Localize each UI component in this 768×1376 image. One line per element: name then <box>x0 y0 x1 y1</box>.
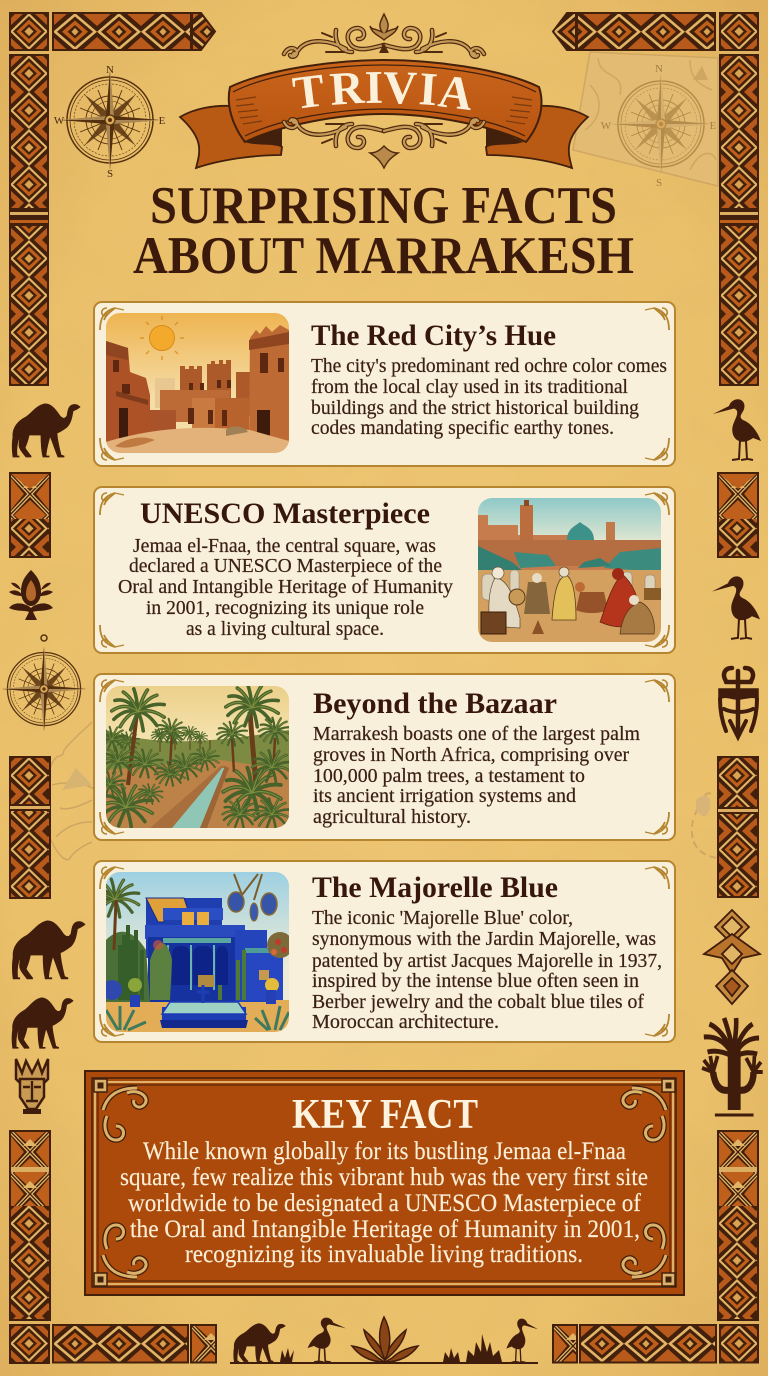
icon: palm silhouette <box>702 1018 763 1115</box>
icon: camel 2 <box>12 921 85 979</box>
faint map: left side <box>50 722 94 860</box>
right ribbon tail <box>486 106 588 168</box>
icon: shrubs <box>443 1334 502 1362</box>
antique map with compass: right: N <box>655 63 663 75</box>
panel: The Red City's Hue <box>94 302 675 466</box>
right border column <box>720 55 758 385</box>
faint map: right side <box>692 793 717 858</box>
icon: tribal symbol <box>719 668 758 737</box>
key fact text: worldwide to be designated a UNESCO Masterpiece of <box>128 1190 642 1217</box>
main title: ABOUT MARRAKESH <box>133 227 634 285</box>
top left corner square <box>10 13 48 50</box>
key fact heading: KEY FACT <box>292 1092 478 1138</box>
panel: The Majorelle Blue <box>91 861 675 1042</box>
body text: from the local clay used in its traditional <box>311 376 628 398</box>
body text <box>311 355 667 439</box>
icon: stork 1 <box>713 399 761 460</box>
bottom left square <box>10 1325 49 1363</box>
compass rose: left: N <box>106 64 114 76</box>
ornament below banner <box>284 119 484 168</box>
illustration: Majorelle garden <box>91 872 293 1032</box>
body text: 100,000 palm trees, a testament to <box>313 765 585 787</box>
antique map with compass: right: W <box>601 120 612 132</box>
trivia heading: I <box>417 63 439 116</box>
left border column <box>10 55 48 385</box>
icon: diamond amulet <box>704 910 760 1004</box>
top right corner square <box>720 13 758 50</box>
panel: UNESCO Masterpiece <box>94 487 675 653</box>
body text: Moroccan architecture. <box>312 1011 499 1033</box>
bottom right strip <box>580 1325 716 1362</box>
heading: The Majorelle Blue <box>312 871 558 904</box>
body text: in 2001, recognizing its unique role <box>146 597 424 619</box>
key fact text: the Oral and Intangible Heritage of Humanity in 2001, <box>130 1216 640 1243</box>
body text: synonymous with the Jardin Majorelle, was <box>312 928 656 950</box>
body text: Berber jewelry and the cobalt blue tiles of <box>312 991 644 1013</box>
trivia heading: R <box>328 62 367 116</box>
compass rose: left: E <box>159 115 166 127</box>
body text: The city's predominant red ochre color comes <box>311 355 667 377</box>
body text: its ancient irrigation systems and <box>313 785 576 807</box>
ornament above banner <box>284 14 484 57</box>
right tile 3 <box>718 1131 758 1320</box>
trivia heading: V <box>383 62 418 115</box>
body text: Jemaa el-Fnaa, the central square, was <box>133 535 436 557</box>
heading: The Red City’s Hue <box>311 319 556 352</box>
bottom silhouette scene <box>230 1317 538 1364</box>
corner flourishes <box>94 1079 675 1286</box>
panel: key fact <box>85 1071 684 1295</box>
main title: SURPRISING FACTS <box>150 177 617 235</box>
body text: The iconic 'Majorelle Blue' color, <box>312 907 573 929</box>
main title <box>133 177 634 285</box>
key fact text: While known globally for its bustling Jemaa el-Fnaa <box>143 1138 626 1165</box>
body text: inspired by the intense blue often seen in <box>312 970 639 992</box>
panel: Beyond the Bazaar <box>94 674 675 840</box>
ribbon inner lines <box>233 65 536 136</box>
icon: stork <box>308 1318 346 1362</box>
body text: buildings and the strict historical building <box>311 397 639 419</box>
ribbon main band <box>229 60 541 142</box>
illustration: palm grove <box>95 685 292 828</box>
body text <box>312 907 662 1033</box>
compass rose: left: W <box>54 115 65 127</box>
compass rose: left <box>54 64 166 180</box>
illustration: red city <box>106 313 289 453</box>
antique map with compass: right: S <box>656 177 662 189</box>
antique map with compass: right <box>573 52 718 189</box>
right tile 1 <box>718 473 758 557</box>
key fact text <box>120 1138 648 1268</box>
left tile 3 <box>10 1131 50 1320</box>
icon: camel <box>234 1324 285 1362</box>
ribbon banner <box>180 60 588 168</box>
icon: stork 2 <box>712 576 760 639</box>
body text: declared a UNESCO Masterpiece of the <box>129 555 442 577</box>
ribbon folds <box>245 125 523 147</box>
body text <box>313 723 640 828</box>
key fact text: square, few realize this vibrant hub was the very first site <box>120 1164 648 1191</box>
body text: Marrakesh boasts one of the largest palm <box>313 723 640 745</box>
antique map with compass: right: E <box>710 120 717 132</box>
left ribbon tail <box>180 106 282 168</box>
body text: Oral and Intangible Heritage of Humanity <box>118 576 454 598</box>
body text: groves in North Africa, comprising over <box>313 744 629 766</box>
top right pattern strip <box>553 13 715 50</box>
icon: stork facing right <box>506 1319 538 1362</box>
icon: tribal mask <box>16 1059 48 1114</box>
body text: as a living cultural space. <box>186 618 384 640</box>
compass rose: left: S <box>107 168 113 180</box>
compass rose: lower left <box>2 635 86 732</box>
bottom right square <box>720 1325 758 1362</box>
bottom right small tile <box>553 1325 577 1362</box>
left tile 2 <box>10 757 50 898</box>
trivia heading: T <box>290 64 327 120</box>
ribbon hatching <box>236 97 532 124</box>
trivia heading: I <box>364 62 383 114</box>
icon: flower emblem <box>9 570 53 620</box>
icon: agave <box>352 1317 418 1362</box>
right tile 2 <box>718 757 758 897</box>
icon: camel 1 <box>12 404 80 457</box>
trivia heading: A <box>436 65 476 121</box>
key fact text: recognizing its invaluable living traditions. <box>185 1241 583 1268</box>
bottom left strip <box>53 1325 188 1362</box>
heading: UNESCO Masterpiece <box>140 497 430 530</box>
body text: codes mandating specific earthy tones. <box>311 417 614 439</box>
icon: camel 3 <box>12 998 73 1048</box>
heading: Beyond the Bazaar <box>313 687 557 720</box>
icon: grass <box>280 1348 294 1362</box>
body text: agricultural history. <box>313 806 471 828</box>
left tile 1 <box>10 473 50 557</box>
bottom left small tile <box>191 1325 216 1362</box>
body text: patented by artist Jacques Majorelle in 1937, <box>312 950 662 972</box>
trivia heading <box>290 62 476 121</box>
illustration: market square <box>478 498 662 642</box>
body text <box>118 535 454 640</box>
top left pattern strip <box>53 13 215 50</box>
